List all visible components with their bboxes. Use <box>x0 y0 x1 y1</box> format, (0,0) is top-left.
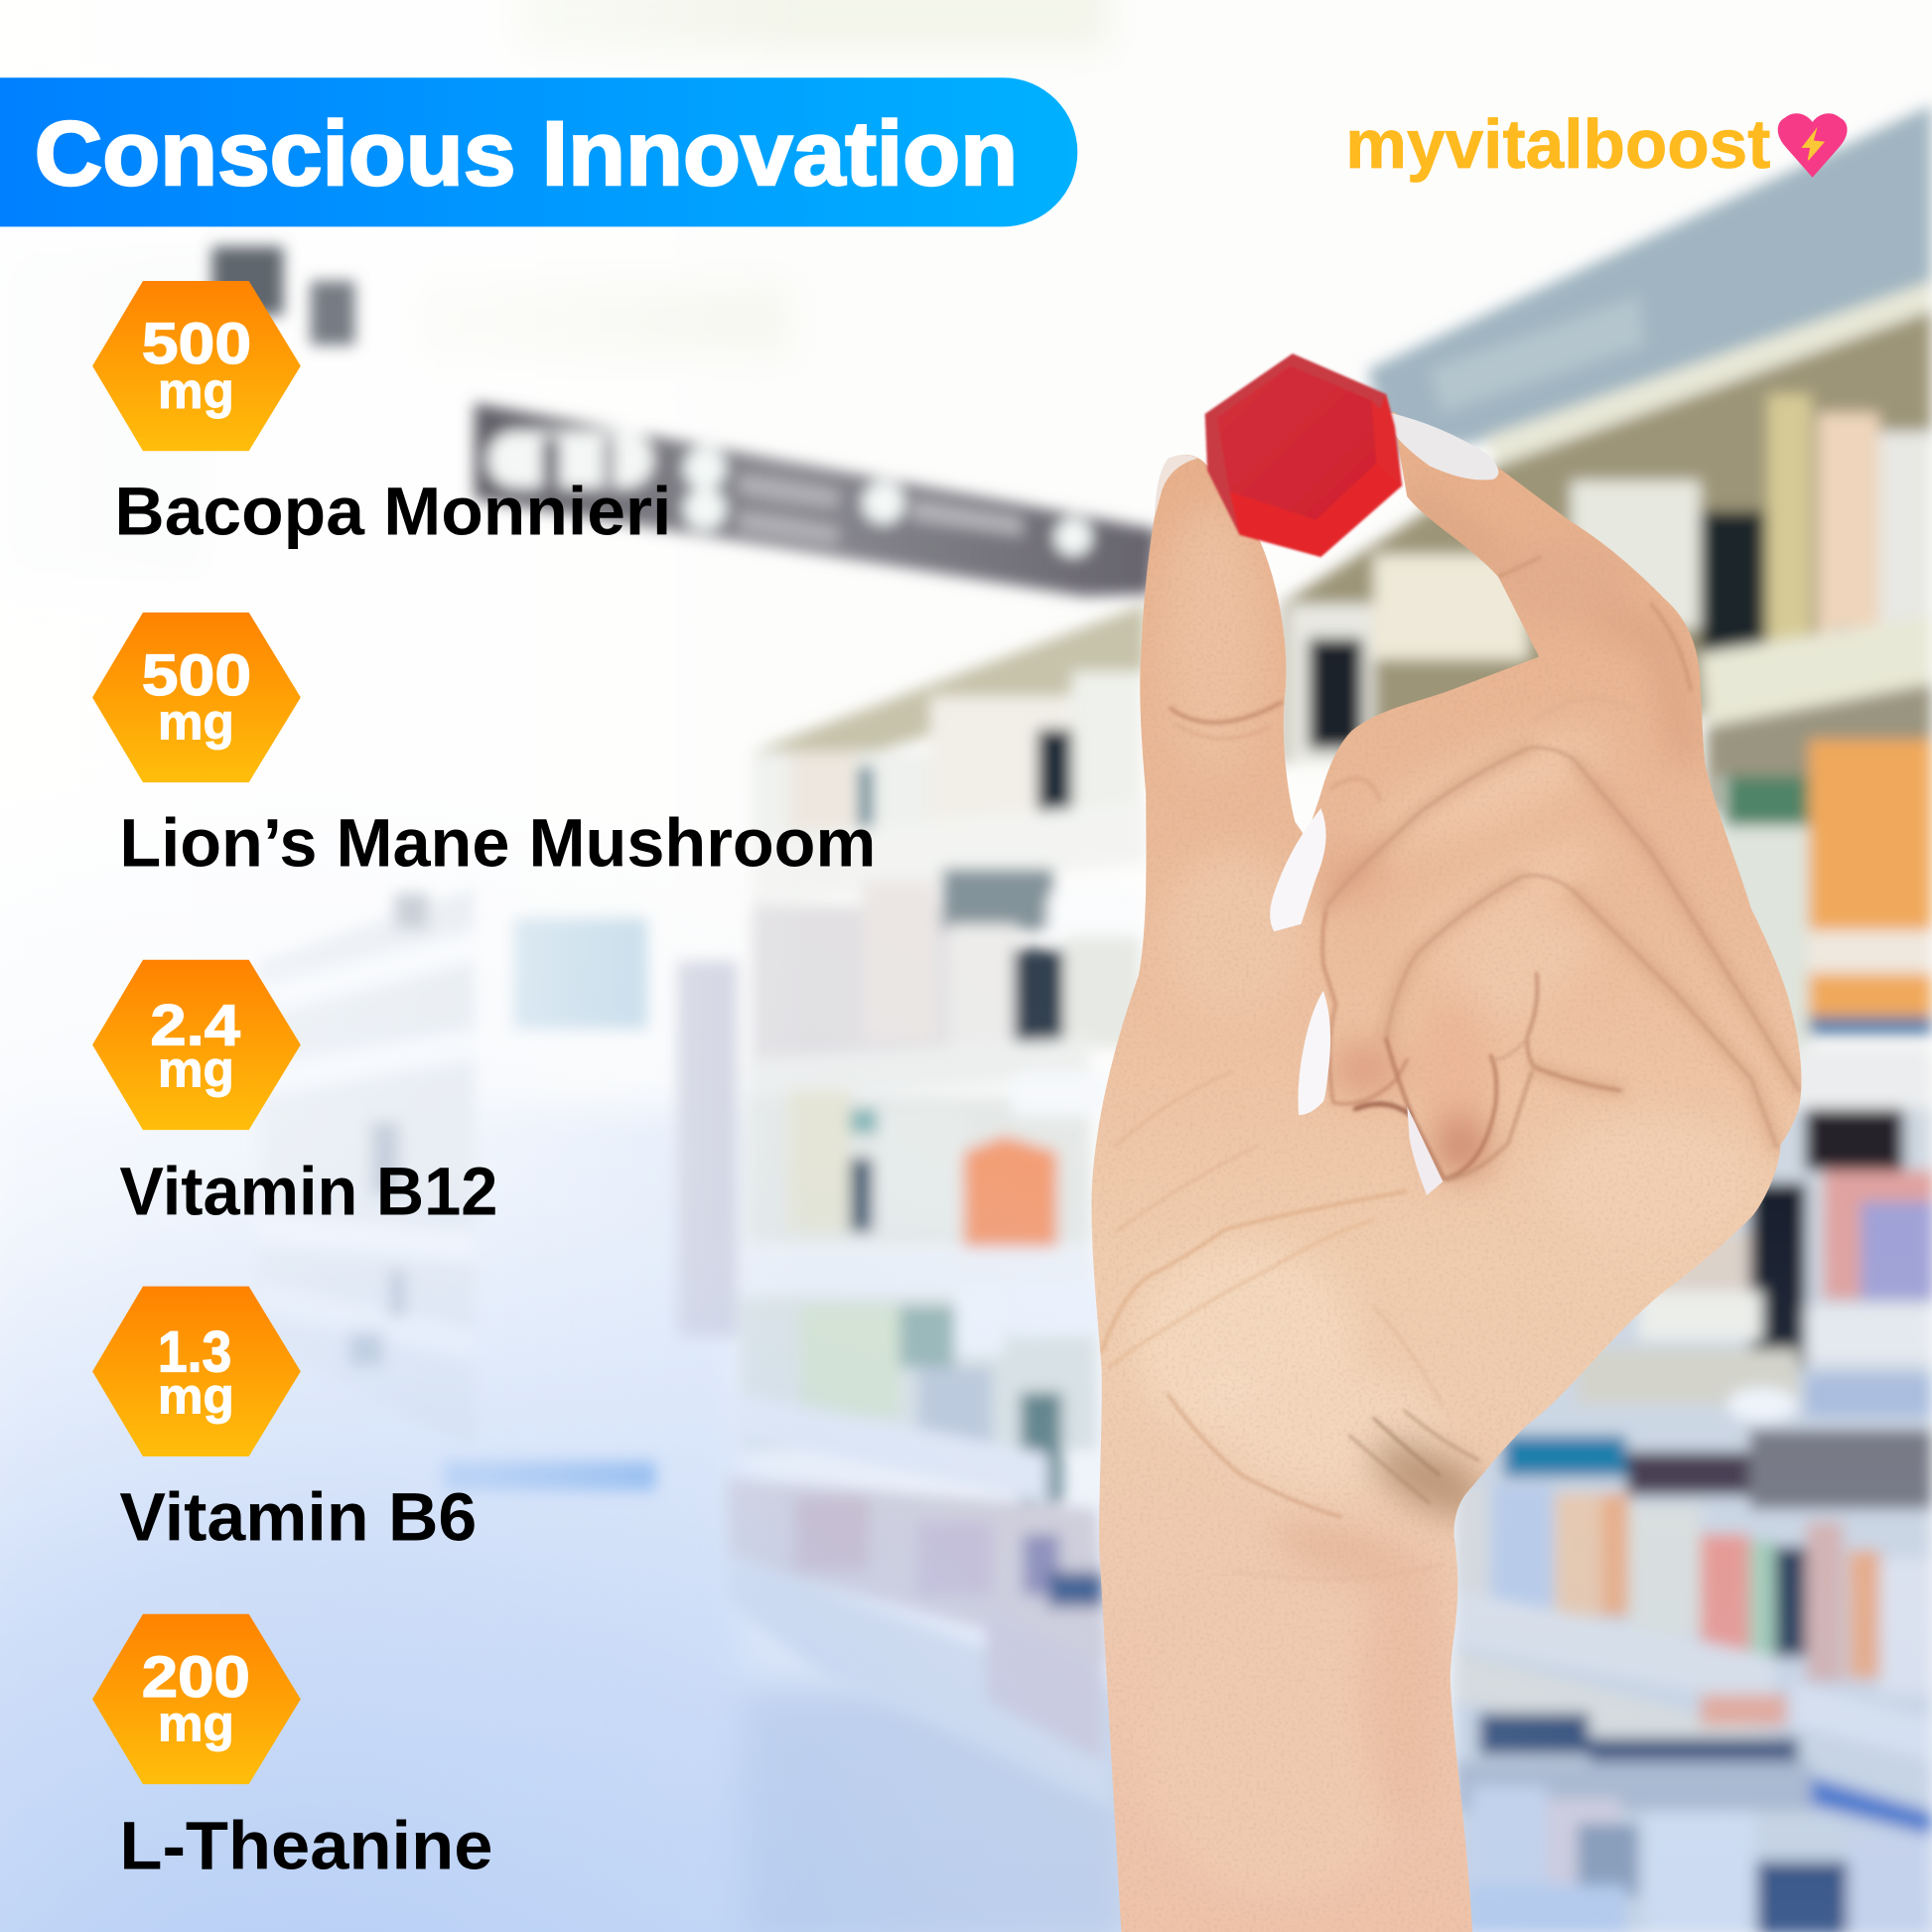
ingredient: Bacopa Monnieri <box>92 281 671 550</box>
nail: index fingertip <box>1390 413 1498 480</box>
thumb nail edge <box>1155 455 1197 517</box>
ingredient: Bacopa Monnieri: mg <box>158 362 234 419</box>
right lower shelves <box>1453 1109 1932 1932</box>
ingredient: Lion's Mane Mushroom: mg <box>158 694 234 751</box>
left washed shelf unit <box>259 888 475 1448</box>
soft finger shadows <box>1325 748 1529 908</box>
hand holding gummy <box>1084 412 1811 1932</box>
ingredient: Lion's Mane Mushroom <box>92 613 876 881</box>
ingredient: Vitamin B6: mg <box>158 1368 234 1425</box>
ingredient: Lion's Mane Mushroom: 500 <box>142 643 251 708</box>
ingredient: Vitamin B12 <box>92 960 497 1230</box>
ingredient: Vitamin B12: mg <box>158 1041 234 1098</box>
right orange books <box>1719 776 1811 1059</box>
title text: Conscious Innovation <box>35 103 1018 205</box>
row two <box>752 905 1017 1066</box>
row four <box>740 1297 1097 1450</box>
ingredient: Vitamin B12: Vitamin B12 <box>119 1155 497 1230</box>
ingredient: Vitamin B6: 1.3 <box>158 1319 231 1384</box>
row five <box>727 1478 1109 1663</box>
thumb and palm creases <box>1171 702 1282 723</box>
title banner <box>0 77 1077 226</box>
ingredient: L-Theanine <box>92 1614 492 1884</box>
wrist creases <box>1169 1395 1340 1517</box>
ingredient: L-Theanine: mg <box>158 1696 234 1752</box>
ceiling fixtures <box>211 246 283 316</box>
logo heart with bolt <box>1778 113 1848 178</box>
row three <box>746 1097 1090 1244</box>
finger creases <box>1325 748 1799 1090</box>
ingredient: Vitamin B6 <box>92 1287 477 1555</box>
ingredient: Vitamin B12: 2.4 <box>150 993 241 1057</box>
ingredient: Lion's Mane Mushroom: Lion’s Mane Mushroom <box>119 805 876 881</box>
ingredient: L-Theanine: 200 <box>142 1645 250 1710</box>
upper right books <box>1571 481 1701 628</box>
nail: folded finger one <box>1270 808 1326 931</box>
centre hanging sign <box>475 403 1159 597</box>
ingredient: Bacopa Monnieri: 500 <box>142 312 251 376</box>
nail: folded finger three <box>1407 1106 1443 1195</box>
ingredient: L-Theanine: L-Theanine <box>119 1809 492 1884</box>
nail: folded finger two <box>1298 991 1330 1115</box>
top-right sign <box>1368 104 1932 459</box>
mid shelves: row one <box>752 604 1146 788</box>
red hexagonal gummy <box>1205 353 1402 557</box>
ingredient: Bacopa Monnieri: Bacopa Monnieri <box>114 475 671 550</box>
logo: myvitalboost: myvitalboost <box>1345 105 1770 183</box>
knuckle creases on index finger <box>1498 557 1540 577</box>
skin texture <box>1084 444 1811 1932</box>
ingredient: Vitamin B6: Vitamin B6 <box>119 1479 477 1555</box>
